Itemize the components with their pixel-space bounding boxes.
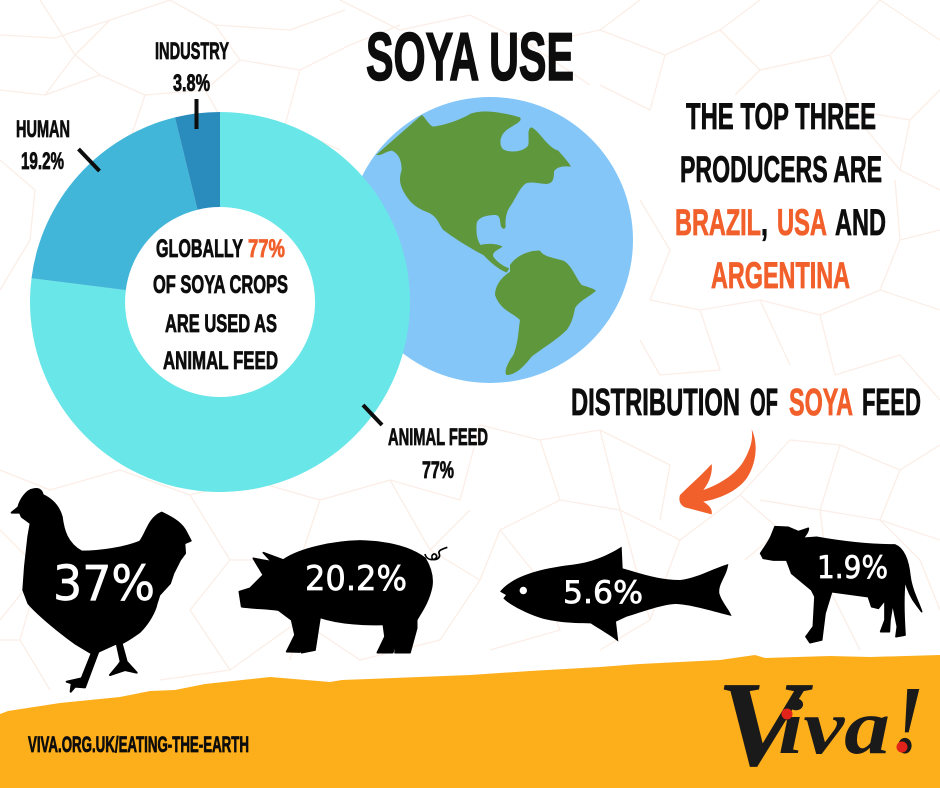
text: top three producers: , [761, 202, 768, 243]
heading: distribution of soya feed: OF [750, 382, 778, 424]
text: top three producers: USA [777, 202, 827, 243]
title: SOYA USE [366, 19, 574, 95]
donut chart [30, 112, 410, 492]
fish 5.6%: 5.6% [563, 575, 643, 611]
donut centre text: ANIMAL FEED [163, 347, 278, 375]
label: human: HUMAN [16, 116, 70, 143]
arrow [679, 429, 756, 514]
label: industry: INDUSTRY [155, 38, 229, 65]
cow 1.9% [761, 527, 922, 643]
pig 20.2%: 20.2% [305, 559, 407, 599]
logo: Viva!: V [716, 657, 813, 788]
footer band [0, 655, 940, 788]
label: animal feed: 77% [422, 457, 454, 484]
label: animal feed: ANIMAL FEED [388, 424, 488, 451]
text: top three producers [675, 96, 886, 296]
logo: Viva!: ! [892, 666, 924, 773]
cow 1.9%: 1.9% [817, 550, 888, 586]
text: top three producers: AND [835, 202, 886, 243]
donut centre text: GLOBALLY [156, 235, 243, 263]
icon: globe [347, 97, 633, 383]
label: animal feed [363, 405, 488, 484]
fish 5.6% [500, 547, 732, 642]
text: top three producers: BRAZIL [675, 202, 761, 243]
chicken 37% [12, 489, 191, 692]
logo: Viva!: iva [778, 683, 890, 770]
text: top three producers: ARGENTINA [711, 255, 850, 296]
pig 20.2% [239, 541, 447, 653]
segment: animal feed 77% [30, 112, 410, 492]
donut centre text [153, 235, 288, 375]
label: industry [155, 38, 229, 129]
donut centre text: ARE USED AS [165, 310, 277, 338]
label: human [16, 116, 100, 175]
chicken 37%: 37% [53, 556, 155, 612]
segment: human 19.2% [32, 117, 198, 290]
donut centre text: OF SOYA CROPS [153, 271, 288, 299]
label: industry: 3.8% [173, 70, 210, 97]
segment: industry 3.8% [175, 112, 220, 210]
logo: Viva! [716, 657, 924, 788]
label: human: 19.2% [21, 148, 64, 175]
heading: distribution of soya feed: DISTRIBUTION [571, 382, 740, 424]
heading: distribution of soya feed: SOYA [789, 382, 853, 424]
donut centre text: 77% [248, 235, 285, 263]
footer url: VIVA.ORG.UK/EATING-THE-EARTH [28, 732, 249, 757]
